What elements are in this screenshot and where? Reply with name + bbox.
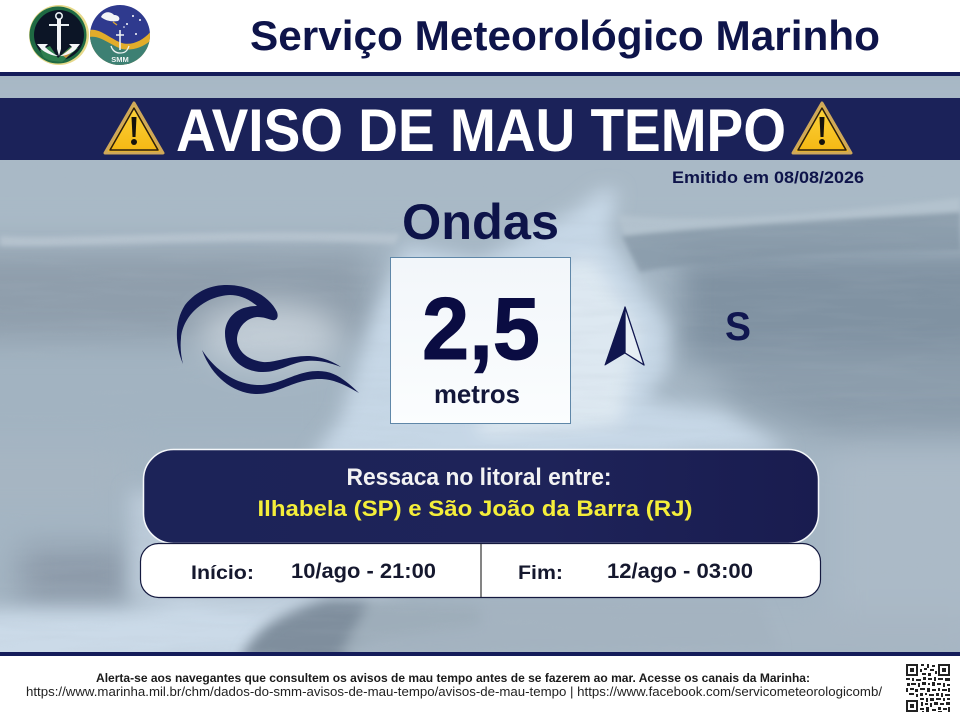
panel: validity period bbox=[140, 544, 820, 598]
footer text: Alerta-se aos navegantes que consultem os avisos de mau tempo antes de se fazerem ao mar. Acesse os canais da Marinha: bbox=[96, 671, 810, 685]
wave height unit: metros bbox=[434, 379, 520, 409]
wave height box bbox=[390, 258, 570, 424]
start time: Início: bbox=[191, 562, 254, 584]
end time bbox=[518, 559, 753, 584]
banner: aviso de mau tempo bbox=[0, 97, 960, 164]
end time: Fim: bbox=[518, 562, 563, 584]
issue date: Emitido em 08/08/2026 bbox=[672, 168, 864, 187]
footer text bbox=[26, 671, 883, 699]
location text: Ilhabela (SP) e São João da Barra (RJ) bbox=[258, 496, 692, 521]
icon: warning triangle left bbox=[105, 103, 163, 153]
start time bbox=[191, 559, 436, 584]
footer white band bbox=[0, 655, 960, 720]
panel heading: Ressaca no litoral entre: bbox=[346, 464, 612, 491]
start time: 10/ago - 21:00 bbox=[291, 559, 436, 583]
title: Serviço Meteorológico Marinho bbox=[250, 12, 880, 59]
footer rule bbox=[0, 652, 960, 656]
logo: anchor emblem bbox=[29, 5, 89, 65]
icon: wave bbox=[177, 285, 359, 394]
direction label: S bbox=[725, 305, 751, 349]
panel: affected coast bbox=[144, 450, 818, 544]
header white band bbox=[0, 0, 960, 72]
header rule bbox=[0, 72, 960, 76]
banner heading: AVISO DE MAU TEMPO bbox=[176, 97, 786, 164]
icon: warning triangle right bbox=[793, 103, 851, 153]
footer text: https://www.marinha.mil.br/chm/dados-do-smm-avisos-de-mau-tempo/avisos-de-mau-tempo | https://www.facebook.com/servicometeorologicomb/ bbox=[26, 685, 883, 699]
logo: SMM emblem bbox=[90, 5, 151, 66]
logo: SMM emblem: SMM bbox=[111, 55, 129, 64]
end time: 12/ago - 03:00 bbox=[607, 559, 753, 583]
icon: direction arrow bbox=[605, 307, 644, 365]
wave height value: 2,5 bbox=[422, 279, 540, 378]
QR code bbox=[906, 664, 950, 712]
heading: ondas: Ondas bbox=[402, 194, 559, 250]
central spray bbox=[0, 190, 790, 680]
